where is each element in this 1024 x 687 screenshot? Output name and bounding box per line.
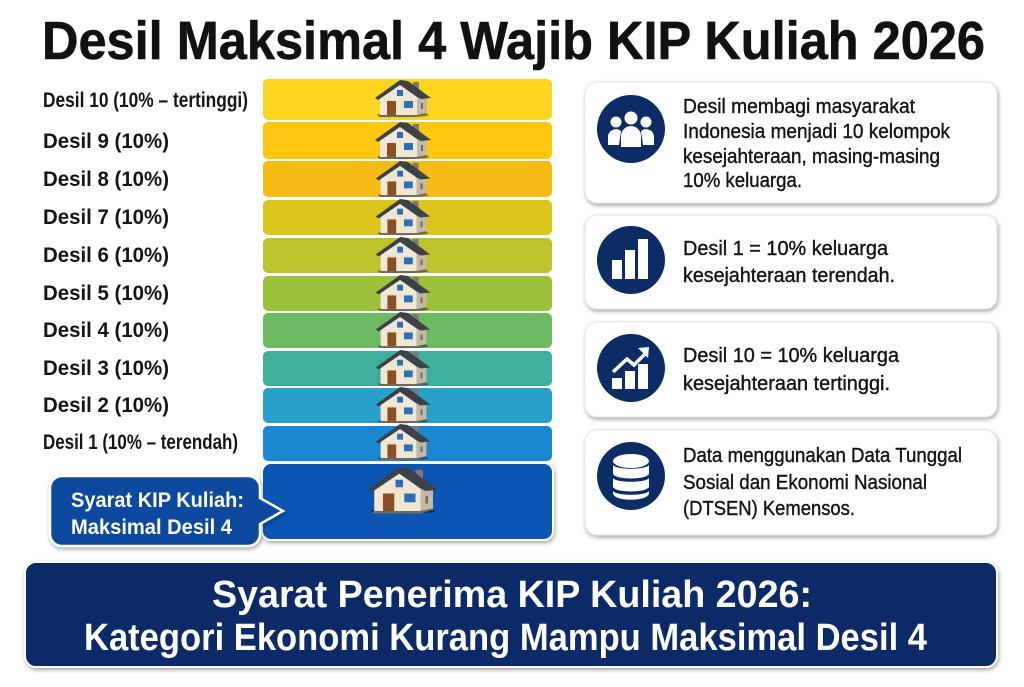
icon: bar chart (597, 226, 665, 294)
bar: desil 2 (263, 387, 552, 423)
text: desil description: kesejahteraan, masing-masing (683, 146, 940, 168)
text: desil 1 description: kesejahteraan terendah. (683, 265, 895, 287)
banner: summary requirement: Syarat Penerima KIP Kuliah 2026: (212, 574, 812, 616)
icon: people (597, 95, 665, 163)
text: desil 10 description: kesejahteraan tertinggi. (683, 373, 890, 395)
label: desil 10: Desil 10 (10% – tertinggi) (43, 89, 248, 112)
bar: desil 9 (263, 122, 552, 159)
decile bar stack (262, 79, 553, 540)
bar: desil 1 (263, 424, 552, 461)
text: data source description: (DTSEN) Kemensos. (683, 498, 855, 520)
label: desil 5: Desil 5 (10%) (43, 282, 169, 305)
text: desil 10 description (683, 345, 900, 395)
decile labels (43, 89, 248, 454)
text: data source description: Sosial dan Ekonomi Nasional (683, 472, 927, 494)
title: Desil Maksimal 4 Wajib KIP Kuliah 2026 (42, 11, 985, 71)
icon: database (597, 442, 665, 510)
text: desil description: Desil membagi masyarakat (683, 96, 915, 118)
label: desil 8: Desil 8 (10%) (43, 168, 169, 191)
panel: desil 10 (585, 322, 997, 417)
text: desil description (683, 96, 951, 192)
banner: summary requirement (25, 562, 997, 667)
label: desil 4: Desil 4 (10%) (43, 319, 169, 342)
label: desil 1: Desil 1 (10% – terendah) (43, 431, 238, 454)
callout: syarat KIP Kuliah: Maksimal Desil 4 (71, 516, 232, 539)
text: desil description: Indonesia menjadi 10 kelompok (683, 121, 951, 143)
label: desil 6: Desil 6 (10%) (43, 244, 169, 267)
label: desil 2: Desil 2 (10%) (43, 394, 169, 417)
bar: desil 7 (263, 199, 552, 235)
panel: desil 1 (585, 215, 997, 309)
label: desil 7: Desil 7 (10%) (43, 206, 169, 229)
text: desil 10 description: Desil 10 = 10% keluarga (683, 345, 900, 367)
panel: data source (585, 430, 997, 535)
label: desil 3: Desil 3 (10%) (43, 357, 169, 380)
bar: desil 3 (263, 350, 552, 386)
text: data source description (683, 445, 962, 520)
banner: summary requirement: Kategori Ekonomi Kurang Mampu Maksimal Desil 4 (84, 617, 927, 659)
bar: desil 8 (263, 161, 552, 197)
bar: desil 6 (263, 237, 552, 273)
text: desil description: 10% keluarga. (683, 170, 802, 192)
text: data source description: Data menggunakan Data Tunggal (683, 445, 962, 467)
text: desil 1 description (683, 238, 895, 287)
bar: highlighted maximum desil 4 (262, 463, 553, 540)
callout: syarat KIP Kuliah (50, 476, 283, 546)
text: desil 1 description: Desil 1 = 10% keluarga (683, 238, 889, 260)
bar: desil 4 (263, 312, 552, 348)
label: desil 9: Desil 9 (10%) (43, 130, 169, 153)
bar: desil 10 (263, 79, 552, 120)
callout: syarat KIP Kuliah: Syarat KIP Kuliah: (71, 489, 244, 512)
bar: desil 5 (263, 275, 552, 311)
panel: desil explanation (585, 82, 997, 203)
icon: rising chart (597, 334, 665, 402)
